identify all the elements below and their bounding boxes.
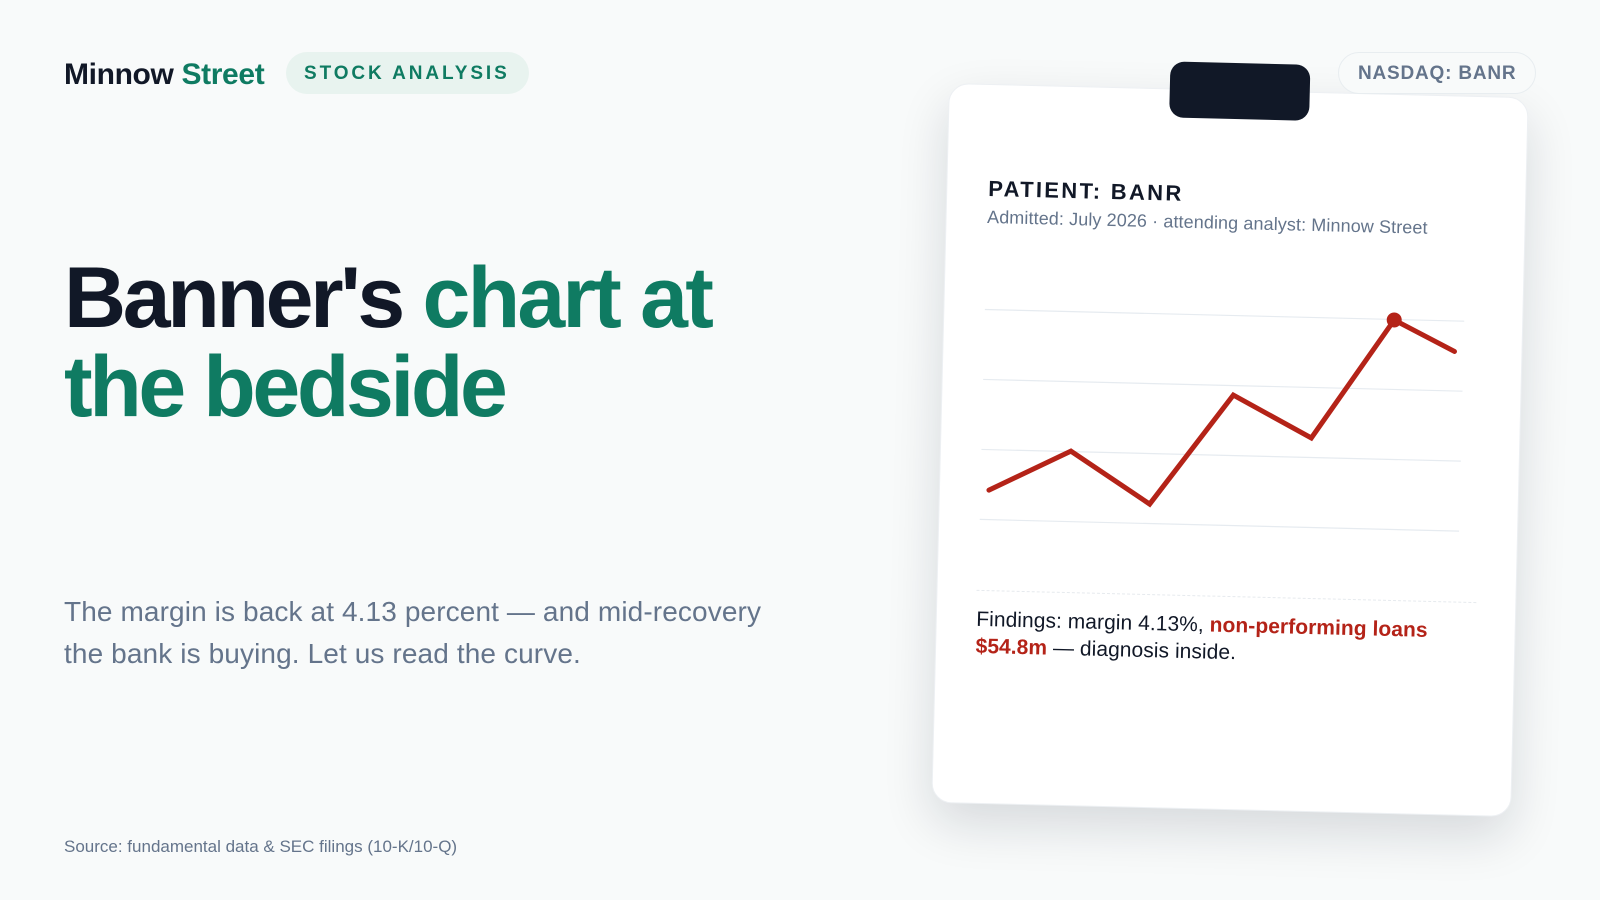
line chart — [980, 309, 1464, 532]
subtitle — [64, 596, 761, 669]
ticker pill: NASDAQ: BANR — [1358, 63, 1516, 84]
findings divider — [976, 590, 1476, 603]
findings text: Findings: margin 4.13%, non-performing loans $54.8m — diagnosis inside. — [975, 608, 1428, 664]
admission line: Admitted: July 2026 · attending analyst: Minnow Street — [987, 207, 1428, 238]
heading: the bedside — [64, 339, 504, 435]
clipboard clip — [1169, 61, 1310, 121]
heading — [64, 250, 713, 435]
subtitle: the bank is buying. Let us read the curve. — [64, 638, 581, 669]
subtitle: The margin is back at 4.13 percent — and mid-recovery — [64, 596, 761, 627]
logo: Minnow Street: Minnow Street — [64, 58, 264, 91]
source note: Source: fundamental data & SEC filings (10-K/10-Q) — [64, 837, 457, 856]
tag: stock analysis: STOCK ANALYSIS — [304, 63, 510, 84]
tag: stock analysis — [286, 52, 529, 94]
heading: Banner's chart at — [64, 250, 711, 346]
patient heading: PATIENT: BANR — [988, 176, 1184, 206]
ticker pill — [1338, 52, 1536, 94]
panel: patient chart card — [931, 83, 1529, 817]
